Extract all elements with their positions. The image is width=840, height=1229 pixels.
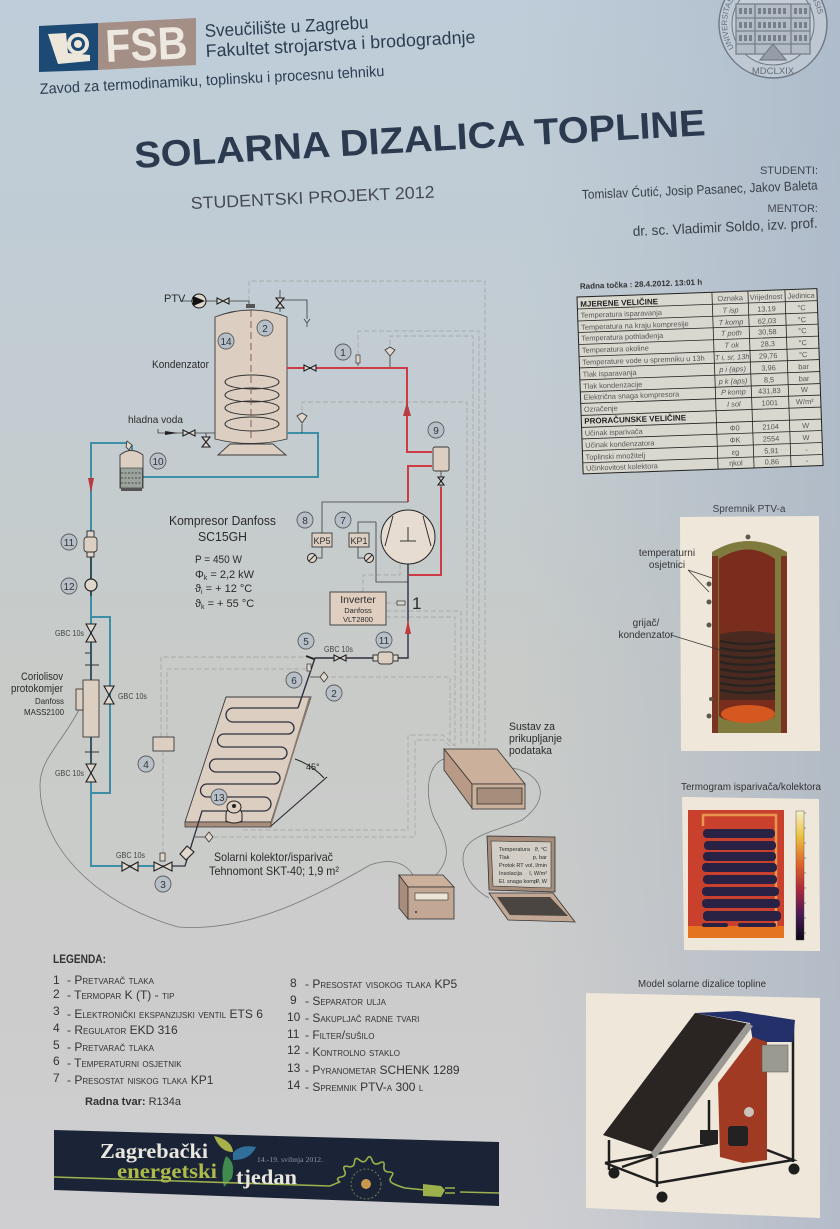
label: data acquisition: podataka: [509, 745, 553, 757]
support top: [695, 1011, 795, 1042]
callout: sensors: osjetnici: [649, 560, 685, 571]
control box: [762, 1045, 788, 1072]
legend column 1: 6: [53, 1054, 60, 1068]
legend column 2: 8: [290, 976, 297, 990]
table rows: p k (aps): [717, 376, 748, 386]
panel: thermogram: [681, 782, 821, 951]
compressor specification: [169, 513, 276, 611]
label: data acquisition: Sustav za: [509, 721, 556, 733]
legend column 2: - Presostat visokog tlaka KP5: [305, 977, 458, 991]
legend column 1: - Temperaturni osjetnik: [67, 1056, 182, 1070]
collector plate: [603, 1013, 750, 1152]
labels: GBC valves: GBC 10s: [116, 851, 145, 860]
legend column 2: - Kontrolno staklo: [305, 1045, 400, 1059]
number markers: 5: [303, 637, 309, 648]
bypass valves: [86, 624, 114, 782]
legend column 2: 13: [287, 1061, 301, 1075]
Coriolis meter: [83, 680, 99, 737]
signal cables: [40, 710, 540, 928]
banner plug: [423, 1184, 455, 1197]
legend column 2: - Filter/sušilo: [305, 1028, 374, 1042]
compressor specification: i: [201, 589, 203, 596]
legend column 1: - Elektronički ekspanzijski ventil ETS 6: [67, 1007, 263, 1021]
table rows: T i, sr, 13h: [715, 352, 750, 362]
oil separator: [433, 447, 449, 487]
table headers: MJERENE VELIČINE: [580, 297, 659, 309]
labels: Coriolis meter: MASS2100: [24, 707, 64, 717]
subtitle: STUDENTSKI PROJEKT 2012: [190, 183, 435, 213]
table rows: 29,76: [759, 351, 778, 361]
sensors: [195, 677, 320, 837]
number markers: 14: [220, 337, 232, 348]
authors block: Tomislav Ćutić, Josip Pasanec, Jakov Baleta: [582, 178, 819, 202]
callout: sensors: [639, 548, 712, 592]
banner: Zagreb energy week: energetski: [117, 1159, 217, 1183]
table rows: T ok: [724, 340, 739, 350]
legend column 1: - Presostat niskog tlaka KP1: [67, 1073, 214, 1087]
schematic: condenser tank: [215, 304, 287, 455]
table rows: °C: [799, 350, 808, 359]
number markers: 3: [160, 880, 166, 891]
table rows: Temperatura isparavanja: [580, 308, 663, 320]
hot water bottom: [721, 705, 775, 723]
laptop readout: Protok RT: [499, 863, 524, 869]
laptop readout: p, bar: [533, 855, 547, 861]
banner gear line: [54, 1157, 499, 1193]
title: SOLARNA DIZALICA TOPLINE: [133, 102, 707, 176]
table headers: [580, 291, 816, 309]
header: FSB logo: [39, 16, 196, 72]
labels: Coriolis meter: Coriolisov: [21, 671, 63, 683]
table rows: bar: [798, 362, 810, 371]
laptop readout: I, W/m²: [529, 871, 547, 877]
tank shell: [712, 541, 787, 733]
sight glass: [85, 557, 97, 596]
legend column 1: 3: [53, 1004, 60, 1018]
legend column 2: - Separator ulja: [305, 994, 387, 1008]
table rows: 431,83: [758, 386, 781, 396]
table rows: Ozračenje: [584, 404, 618, 414]
filter: [373, 652, 398, 664]
caption: Model solarne dizalice topline: [638, 979, 766, 990]
banner petals: [214, 1136, 256, 1187]
banner: Zagreb energy week: [54, 1130, 499, 1206]
legend column 1: 2: [53, 987, 60, 1001]
table rows: -: [805, 456, 809, 465]
labels: GBC valves: [55, 629, 353, 860]
inverter: 1: [412, 594, 421, 613]
table rows: Temperatura okoline: [582, 344, 649, 355]
labels: Coriolis meter: Danfoss: [35, 696, 64, 706]
legend: [53, 952, 460, 1108]
measurement table: [577, 278, 823, 474]
suction pipe with filter and valve: [195, 502, 411, 842]
labels: GBC valves: GBC 10s: [324, 645, 353, 654]
legend column 2: - Pyranometar SCHENK 1289: [305, 1063, 460, 1077]
compressor specification: P = 450 W: [195, 554, 243, 566]
tank feet: [218, 444, 286, 455]
colour scale: [796, 811, 806, 940]
refrigerant pipe: liquid (blue): [88, 413, 318, 866]
compressor specification: = + 55 °C: [205, 598, 254, 610]
table rows: 5,91: [764, 446, 779, 456]
legend column 2: 11: [287, 1027, 300, 1041]
cold water inlet: [128, 414, 215, 447]
table rows: -: [805, 445, 808, 454]
logo wordmark: FSB: [104, 16, 188, 72]
table rows: 2104: [762, 422, 779, 432]
laptop readout: vol, l/min: [525, 863, 547, 869]
table rows: εg: [732, 447, 739, 457]
cold water inlet: hladna voda: [128, 414, 183, 426]
PTV outlet with pump: [164, 290, 310, 327]
legend column 1: - Termopar K (T) - tip: [67, 988, 174, 1002]
serpentine tube: [157, 708, 298, 866]
compressor specification: ϑ: [195, 598, 201, 610]
header: institution: [39, 12, 476, 98]
legend column 2: 14: [287, 1078, 301, 1092]
number markers: 6: [291, 676, 297, 687]
table rows: Toplinski množitelj: [585, 451, 646, 462]
table rows: 28,3: [760, 339, 775, 349]
table rows: T isp: [722, 305, 739, 315]
compressor specification: Kompresor Danfoss: [169, 513, 276, 528]
table rows: Temperatura na kraju kompresije: [581, 319, 689, 332]
heating coil: [720, 631, 775, 700]
legend column 1: 5: [53, 1038, 60, 1052]
callout: heater: kondenzator: [618, 630, 674, 641]
caption: Spremnik PTV-a: [713, 504, 786, 515]
callout: heater: grijač/: [633, 618, 660, 629]
compressor: [381, 510, 435, 564]
KP1: KP1: [350, 536, 368, 546]
number markers: 11: [379, 636, 390, 647]
table rows: 1001: [761, 398, 778, 408]
collector frame: [651, 1023, 753, 1159]
table rows: Učinkovitost kolektora: [586, 461, 659, 473]
table rows: I sol: [727, 399, 741, 409]
gauge: [744, 1107, 754, 1117]
table rows: W: [802, 433, 810, 442]
table rows: [580, 303, 816, 473]
inverter: Danfoss: [344, 606, 372, 615]
label: collector: Solarni kolektor/isparivač: [214, 850, 333, 864]
schematic: data acquisition dashed lines: [161, 281, 485, 856]
table rows: 3,96: [761, 363, 776, 373]
legend heading: LEGENDA:: [53, 952, 106, 966]
table rows: W: [801, 385, 808, 394]
number markers: 2: [331, 689, 337, 700]
legend column 1: - Pretvarač tlaka: [67, 973, 155, 987]
tank body: [215, 310, 287, 444]
legend column 1: - Pretvarač tlaka: [67, 1040, 155, 1054]
table rows: 30,58: [758, 327, 777, 337]
number markers: 13: [213, 793, 225, 804]
number markers: 7: [340, 516, 346, 527]
panel: tank cutaway: [618, 504, 820, 751]
labels: Coriolis meter: [11, 671, 64, 717]
table rows: PRORAČUNSKE VELIČINE: [584, 413, 687, 426]
header: institution: Sveučilište u Zagrebu: [204, 12, 369, 41]
inverter: Inverter: [340, 594, 376, 606]
table rows: Električna snaga kompresora: [583, 389, 680, 402]
table rows: Učinak kondenzatora: [585, 438, 656, 450]
header: institution: Fakultet strojarstva i brodogradnje: [205, 27, 476, 61]
table rows: °C: [797, 303, 806, 312]
number markers: 12: [63, 582, 75, 593]
laptop readout: Temperatura: [499, 847, 531, 853]
compressor specification: k: [201, 604, 205, 611]
temperature probe: [250, 310, 252, 442]
table headers: Oznaka: [717, 293, 744, 303]
pyranometer: [226, 801, 242, 823]
legend column 2: 9: [290, 993, 297, 1007]
table caption: Radna točka : 28.4.2012. 13:01 h: [580, 278, 702, 291]
table rows: Temperature vode u spremniku u 13h: [582, 354, 705, 367]
number markers: 10: [152, 457, 164, 468]
header: institution: Zavod za termodinamiku, toplinsku i procesnu tehniku: [39, 63, 385, 98]
laptop readout: [499, 847, 548, 885]
authors block: dr. sc. Vladimir Soldo, izv. prof.: [632, 215, 818, 239]
working fluid: Radna tvar: R134a: [85, 1096, 182, 1108]
pump: [192, 294, 206, 308]
table rows: Učinak isparivača: [585, 427, 644, 438]
university seal: MDCLXIX: [752, 66, 795, 77]
table rows: Tlak kondenzacije: [583, 380, 642, 391]
label: data acquisition: [509, 721, 562, 757]
number markers: 11: [64, 538, 75, 549]
valve: [334, 655, 346, 661]
table rows: 8,5: [764, 375, 774, 385]
inverter: VLT2800: [343, 615, 373, 624]
laptop readout: Tlak: [499, 855, 510, 861]
legend column 2: 12: [287, 1043, 301, 1057]
table rows: 62,03: [758, 316, 776, 326]
banner text: Zagrebački: [100, 1139, 208, 1163]
regulator box: [153, 737, 174, 751]
legend column 2: 10: [287, 1010, 301, 1024]
number markers: 4: [143, 760, 149, 771]
table rows: °C: [798, 338, 808, 347]
labels: GBC valves: GBC 10s: [55, 629, 84, 638]
instrument box: [399, 875, 454, 919]
tank top fitting: [246, 304, 255, 308]
legend column 1: - Regulator EKD 316: [67, 1023, 178, 1037]
frame: [605, 1020, 793, 1187]
table rows: 2554: [763, 434, 779, 444]
laptop readout: Insolacija: [499, 871, 523, 877]
compressor specification: ϑ: [195, 583, 201, 595]
university seal: [718, 0, 828, 79]
table rows: W: [802, 421, 809, 430]
table rows: T komp: [719, 317, 743, 327]
pressure switches: [308, 533, 374, 562]
tilt angle: [271, 759, 327, 826]
laptop: [487, 836, 575, 922]
table headers: Vrijednost: [750, 292, 783, 302]
legend column 2: [287, 976, 460, 1094]
left branch: filter, sight glass, flow meter: [76, 531, 114, 782]
panel: 3D model: [586, 979, 820, 1218]
table rows: ΦK: [730, 435, 741, 445]
sensor bosses: [706, 534, 750, 718]
laptop readout: P, W: [536, 879, 548, 885]
number markers: [61, 320, 444, 892]
callout: heater: [618, 618, 720, 650]
seal building: [736, 4, 810, 60]
red storage tank: [718, 1037, 767, 1163]
legend column 2: - Spremnik PTV-a 300 l: [305, 1080, 424, 1094]
refrigerant pipe: discharge (red): [287, 347, 441, 575]
authors block: STUDENTI:: [760, 165, 818, 177]
table rows: °C: [798, 326, 807, 335]
legend column 1: 7: [53, 1071, 60, 1085]
labels: Coriolis meter: protokomjer: [11, 683, 63, 695]
compressor specification: = 2,2 kW: [207, 569, 255, 581]
callout: sensors: temperaturni: [639, 548, 695, 559]
banner: Zagreb energy week: tjedan: [236, 1165, 297, 1189]
table rows: 0,86: [765, 457, 779, 467]
pump detail: [728, 1126, 748, 1146]
legend column 1: [53, 973, 263, 1087]
laptop readout: El. snaga komp.: [499, 879, 539, 885]
table rows: Φ0: [730, 423, 740, 433]
table headers: Jedinica: [787, 291, 816, 301]
caption: Termogram isparivača/kolektora: [681, 782, 821, 793]
table rows: Temperatura pothlađenja: [581, 331, 664, 343]
table rows: Tlak isparavanja: [583, 368, 638, 379]
laptop readout: ϑ, °C: [535, 847, 547, 853]
number markers: 1: [340, 348, 346, 359]
authors block: MENTOR:: [767, 203, 818, 215]
legend column 1: 1: [53, 973, 60, 987]
labels: GBC valves: GBC 10s: [118, 692, 147, 701]
number markers: 8: [302, 516, 308, 527]
table rows: °C: [798, 315, 807, 324]
legend column 2: - Sakupljač radne tvari: [305, 1011, 419, 1025]
label: Kondenzator: Kondenzator: [152, 359, 209, 371]
heating coil: [225, 375, 279, 431]
compressor specification: Φ: [195, 569, 204, 581]
table rows: p i (aps): [718, 364, 747, 374]
compressor specification: k: [204, 575, 208, 582]
KP5: KP5: [313, 536, 331, 546]
PTV outlet with pump: PTV: [164, 293, 186, 305]
authors block: [582, 165, 819, 239]
wheels: [608, 1164, 800, 1202]
expansion valve assembly: [122, 846, 194, 871]
table rows: bar: [798, 374, 810, 383]
legend column 1: 4: [53, 1021, 60, 1035]
number markers: 9: [433, 426, 439, 437]
collector: [157, 697, 327, 866]
tilt angle: 45°: [306, 762, 320, 772]
table rows: P komp: [721, 387, 746, 397]
table rows: 13,19: [757, 304, 776, 314]
banner: Zagreb energy week: 14.-19. svibnja 2012.: [257, 1155, 323, 1164]
refrigerant receiver: [120, 441, 143, 491]
table rows: T poth: [721, 328, 742, 338]
piping: [700, 1130, 718, 1144]
labels: GBC valves: GBC 10s: [55, 769, 84, 778]
safety valve: [276, 298, 284, 308]
banner sun: [351, 1169, 381, 1199]
compressor specification: SC15GH: [198, 529, 247, 544]
number markers: 2: [262, 324, 268, 335]
inverter: [330, 592, 421, 625]
label: collector: Tehnomont SKT-40; 1,9 m²: [209, 864, 339, 878]
compressor specification: = + 12 °C: [203, 583, 252, 595]
logo mark: [48, 33, 90, 64]
collector plate: [185, 697, 311, 822]
filter: [84, 531, 97, 557]
data logger: [444, 749, 525, 809]
label: data acquisition: prikupljanje: [509, 733, 562, 745]
label: collector: [209, 850, 339, 878]
tank interior: [719, 550, 775, 722]
thermal image: [688, 810, 784, 938]
table rows: W/m²: [796, 397, 814, 406]
table rows: ηkol: [729, 458, 743, 468]
